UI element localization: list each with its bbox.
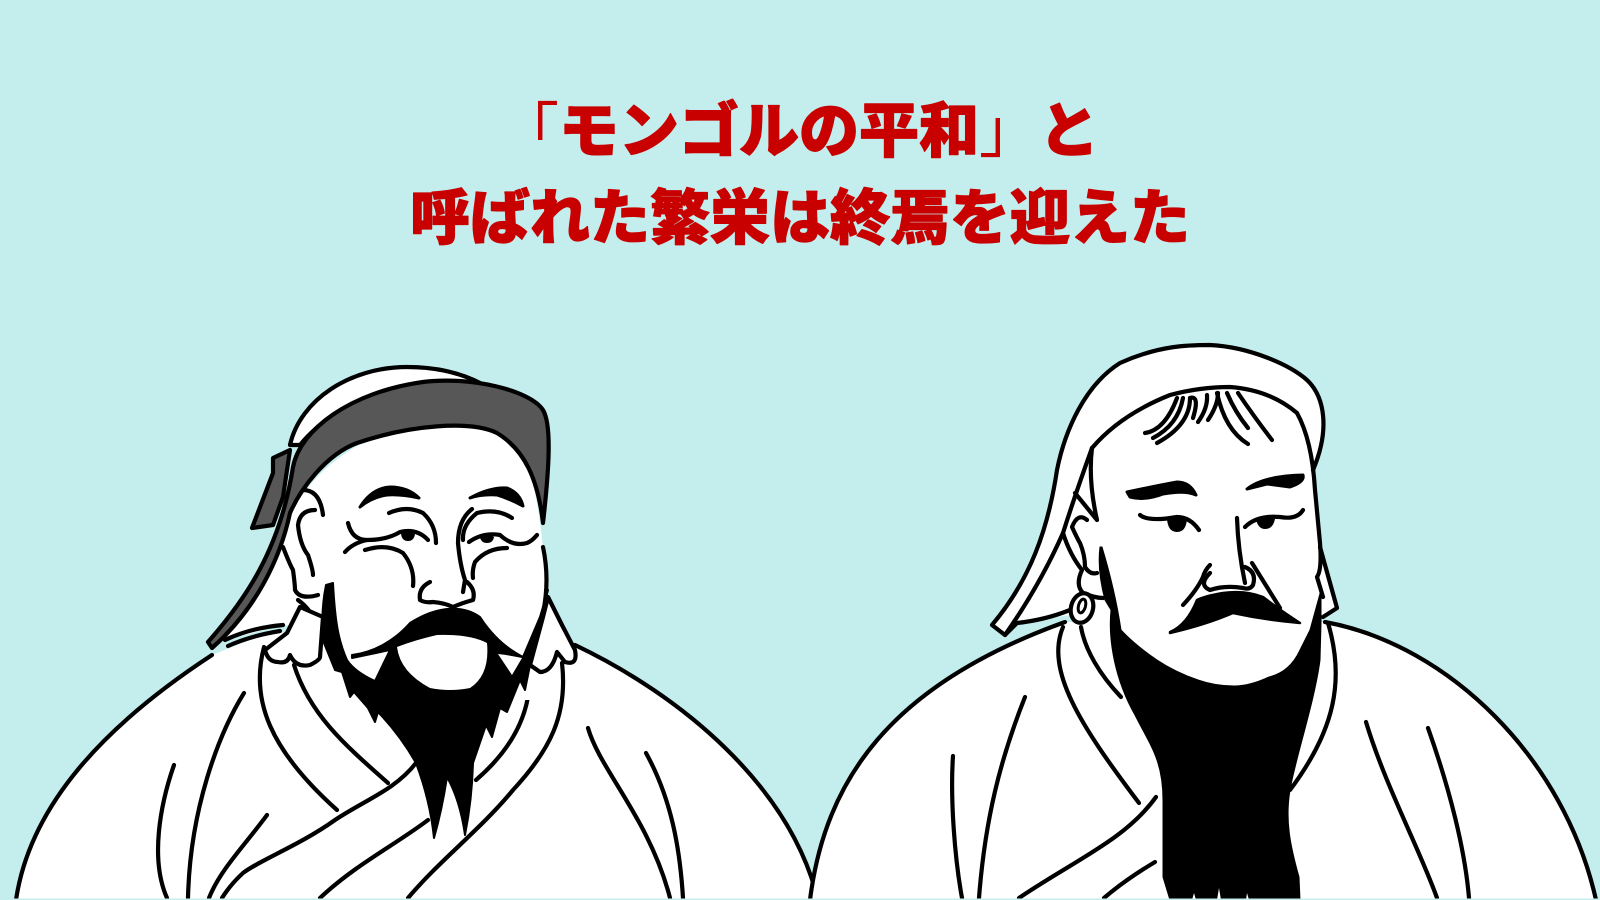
hood top: left ruler: [290, 367, 482, 445]
beard: left ruler: [322, 583, 548, 838]
robe: right ruler: [810, 622, 1596, 900]
moustache: right ruler: [1170, 592, 1300, 633]
ear and face edge: left ruler: [283, 490, 546, 613]
facial features: left ruler: [345, 487, 537, 607]
dark cap band: [208, 381, 549, 648]
hood: right ruler: [992, 345, 1337, 640]
illustration: right ruler with long beard: [810, 345, 1596, 900]
title: 呼ばれた繁栄は終焉を迎えた: [410, 185, 1190, 252]
collar ruffle left: [265, 607, 323, 666]
face fill: left ruler: [225, 425, 548, 700]
bottom edge strip: [0, 898, 1600, 900]
earring: [1067, 591, 1097, 625]
title: [410, 98, 1190, 252]
cap flap: [252, 450, 290, 528]
illustration: left ruler with dark cap: [16, 367, 818, 900]
facial features: right ruler: [1127, 475, 1303, 608]
hair strands: right ruler: [1145, 393, 1272, 444]
long beard: right ruler: [1099, 547, 1321, 900]
face: right ruler: [1005, 387, 1323, 635]
hood cape lines: left ruler: [225, 625, 283, 646]
robe: left ruler: [16, 632, 818, 900]
title: 「モンゴルの平和」と: [499, 98, 1099, 165]
collar ruffle right: [530, 597, 576, 672]
